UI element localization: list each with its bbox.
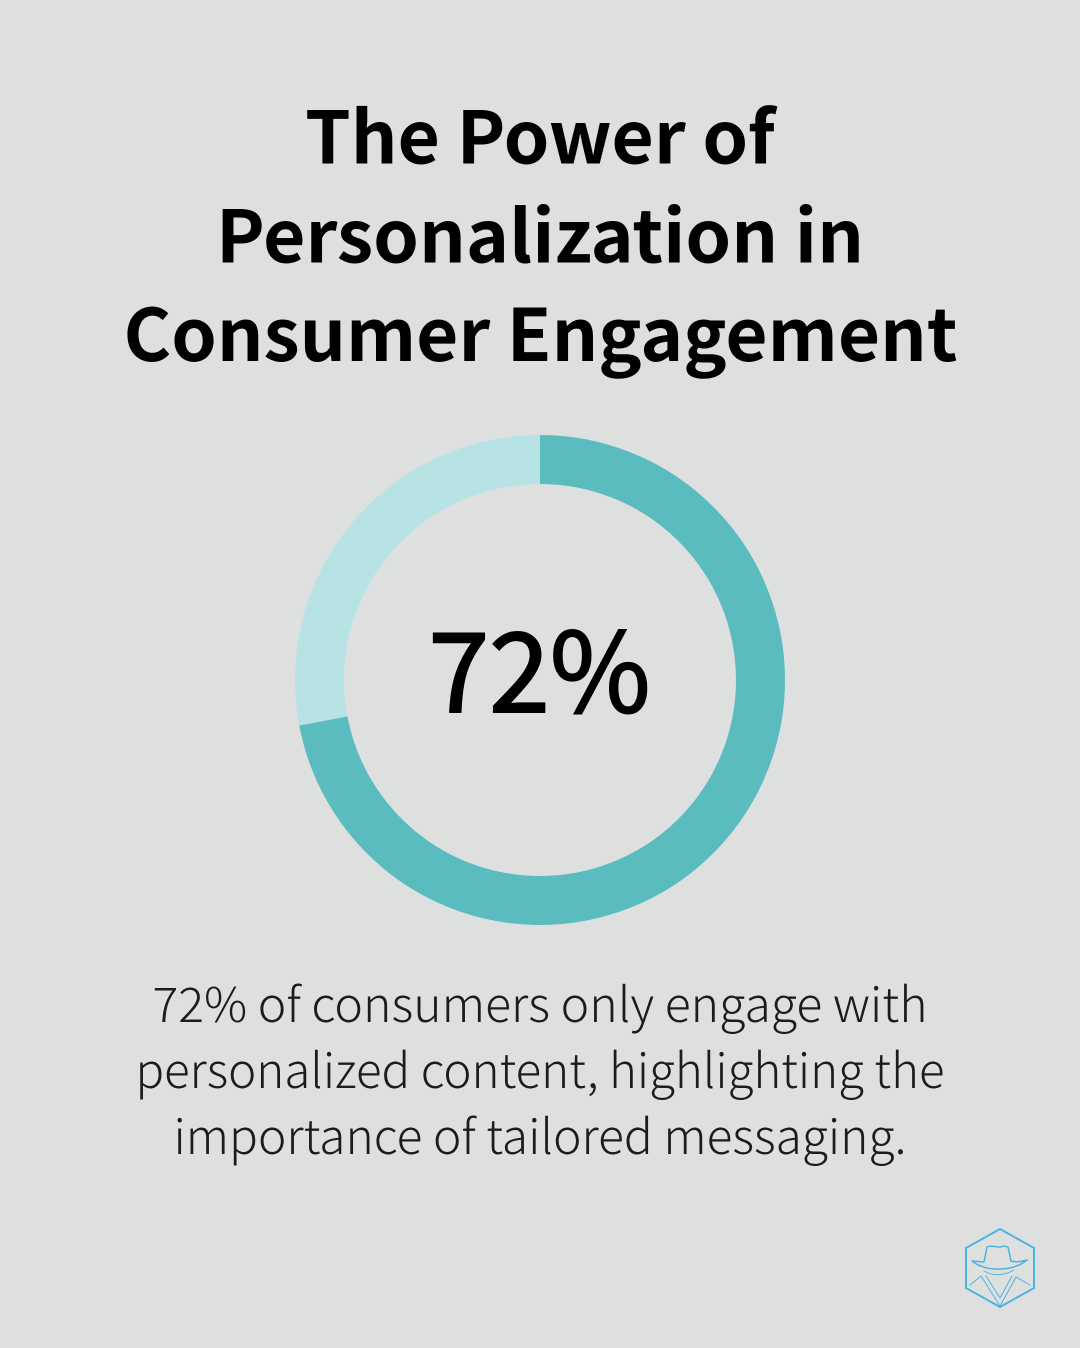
title: The Power of bbox=[305, 80, 778, 184]
donut chart: 72% bbox=[320, 460, 760, 900]
title: Consumer Engagement bbox=[124, 277, 958, 382]
title: Personalization in bbox=[216, 178, 864, 284]
title bbox=[124, 80, 958, 382]
description text: personalized content, highlighting the bbox=[136, 1032, 944, 1102]
description text bbox=[136, 966, 944, 1168]
description text: importance of tailored messaging. bbox=[174, 1098, 906, 1168]
donut center value: 72% bbox=[428, 584, 650, 744]
description text: 72% of consumers only engage with bbox=[152, 966, 928, 1036]
icon: logo hexagon with hat spy bbox=[966, 1229, 1034, 1307]
